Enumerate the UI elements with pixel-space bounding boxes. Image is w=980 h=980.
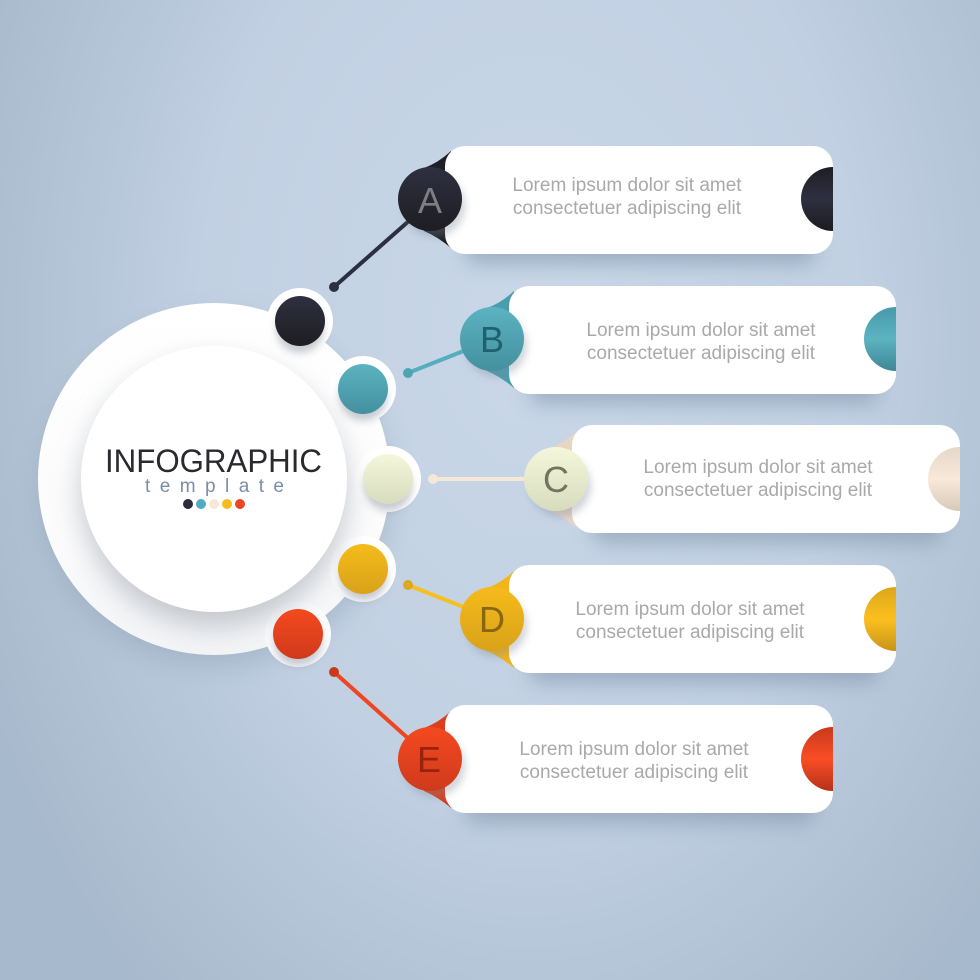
connector: C	[428, 474, 528, 484]
text: E: consectetuer adipiscing elit	[520, 762, 749, 783]
hub title: INFOGRAPHIC	[105, 443, 322, 479]
connector: A	[329, 220, 410, 292]
text: B: Lorem ipsum dolor sit amet	[586, 320, 816, 341]
tab: A	[801, 167, 833, 231]
letter: B: B	[480, 319, 504, 360]
ribbon: A	[424, 151, 451, 248]
central hub	[38, 288, 421, 667]
ribbon: C	[550, 431, 577, 528]
letter: A: A	[418, 180, 442, 221]
text: D: consectetuer adipiscing elit	[576, 622, 805, 643]
ribbon: E	[424, 711, 451, 808]
palette dots	[183, 499, 245, 509]
bubble: B	[338, 364, 388, 421]
connector: D	[403, 580, 466, 608]
tab: E	[801, 727, 833, 791]
bubble halo: B	[330, 356, 396, 422]
card: D	[509, 565, 896, 673]
panel: E	[398, 705, 865, 823]
ribbon: D	[487, 571, 514, 668]
hub subtitle: template	[145, 476, 284, 497]
hub outer ring	[38, 303, 390, 655]
text: D: Lorem ipsum dolor sit amet	[575, 599, 805, 620]
ribbon: B	[487, 291, 514, 388]
text: C: consectetuer adipiscing elit	[644, 480, 873, 501]
badge: E	[398, 727, 462, 791]
letter: E: E	[417, 739, 441, 780]
bubble: C	[363, 454, 413, 511]
badge: D	[460, 587, 524, 651]
connector: B	[403, 350, 466, 378]
badge: C	[524, 447, 588, 511]
panel: A	[398, 146, 865, 264]
bubble: A	[275, 296, 325, 353]
bubble halo: D	[330, 536, 396, 602]
card: E	[445, 705, 833, 813]
connector: E	[329, 667, 410, 740]
bubble halo: C	[355, 446, 421, 512]
bubble: D	[338, 544, 388, 601]
panel: C	[524, 425, 980, 543]
bubble halo: E	[265, 601, 331, 667]
text: A: Lorem ipsum dolor sit amet	[512, 175, 742, 196]
card: B	[509, 286, 896, 394]
letter: C: C	[543, 459, 569, 500]
text: B: consectetuer adipiscing elit	[587, 343, 816, 364]
badge: A	[398, 167, 462, 231]
panel: B	[460, 286, 928, 404]
tab: D	[864, 587, 896, 651]
badge: B	[460, 307, 524, 371]
card: C	[572, 425, 960, 533]
tab: C	[928, 447, 960, 511]
text: E: Lorem ipsum dolor sit amet	[519, 739, 749, 760]
tab: B	[864, 307, 896, 371]
bubble halo: A	[267, 288, 333, 354]
letter: D: D	[479, 599, 505, 640]
text: A: consectetuer adipiscing elit	[513, 198, 742, 219]
panel: D	[460, 565, 928, 683]
text: C: Lorem ipsum dolor sit amet	[643, 457, 873, 478]
card: A	[445, 146, 833, 254]
bubble: E	[273, 609, 323, 666]
hub inner disc	[81, 346, 347, 612]
